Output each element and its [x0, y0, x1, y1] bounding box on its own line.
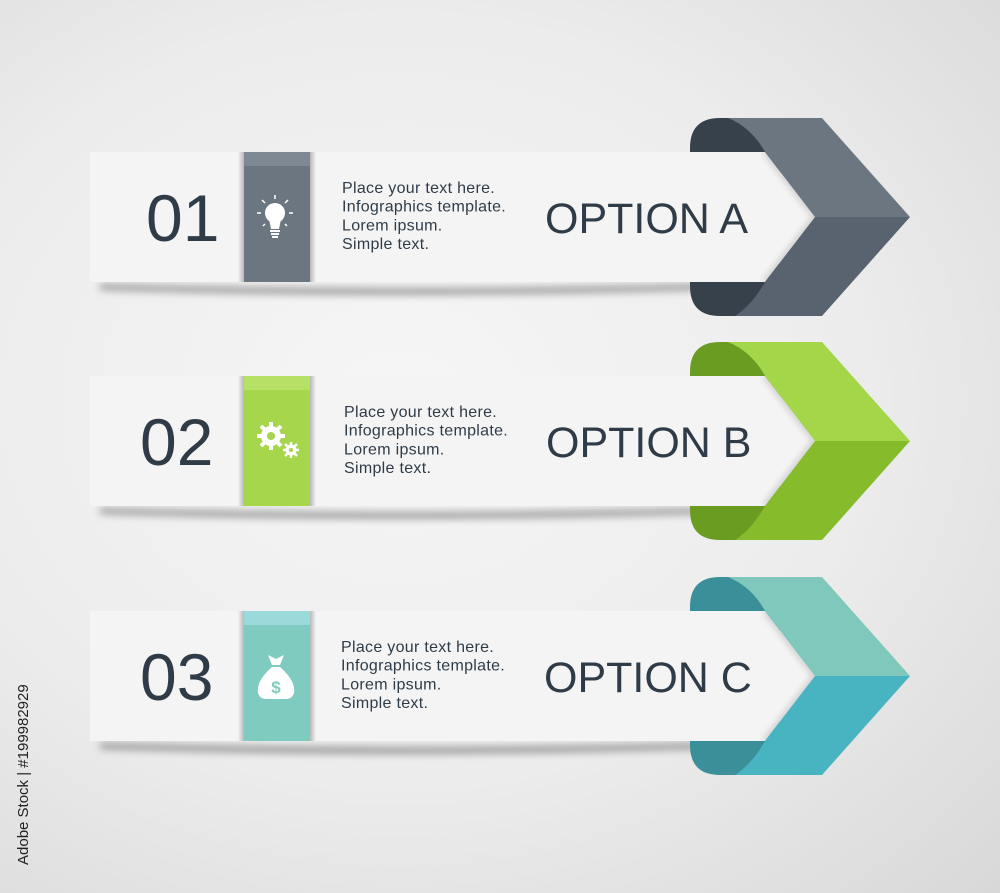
description text C: Simple text. — [341, 695, 428, 712]
arrow upper face — [728, 342, 910, 441]
number 03: 03 — [140, 640, 213, 714]
arrow upper face — [728, 118, 910, 217]
shadow — [100, 284, 700, 295]
row A: option A — [90, 118, 910, 316]
description text C: Infographics template. — [341, 658, 505, 675]
description text A: Place your text here. — [342, 180, 495, 197]
icon: money bag: $ — [271, 678, 281, 697]
arrow back fold — [690, 342, 780, 540]
label OPTION B: OPTION B — [546, 419, 751, 467]
description text A: Lorem ipsum. — [342, 217, 443, 234]
tab with icon — [238, 611, 316, 741]
description text B: Place your text here. — [344, 404, 497, 421]
white band — [90, 611, 815, 741]
description text A: Simple text. — [342, 236, 429, 253]
label OPTION C: OPTION C — [544, 654, 752, 702]
arrow back fold — [690, 577, 780, 775]
arrow back fold — [690, 118, 780, 316]
shadow — [100, 743, 700, 754]
icon: light bulb — [257, 195, 293, 238]
number 01: 01 — [146, 181, 219, 255]
arrow lower face — [735, 217, 910, 316]
arrow lower face — [735, 676, 910, 775]
icon: gears — [257, 422, 299, 458]
shadow — [100, 508, 700, 519]
tab with icon — [238, 152, 316, 282]
white band — [90, 152, 815, 282]
description text B: Infographics template. — [344, 423, 508, 440]
white band — [90, 376, 815, 506]
number 02: 02 — [140, 405, 213, 479]
tab with icon — [238, 376, 316, 506]
side credit text: Adobe Stock | #199982929 — [15, 684, 32, 865]
row C: option C — [90, 577, 910, 775]
row B: option B — [90, 342, 910, 540]
description text B: Simple text. — [344, 460, 431, 477]
description text B: Lorem ipsum. — [344, 441, 445, 458]
description text C: Lorem ipsum. — [341, 676, 442, 693]
description text A: Infographics template. — [342, 199, 506, 216]
description text C: Place your text here. — [341, 639, 494, 656]
arrow lower face — [735, 441, 910, 540]
arrow upper face — [728, 577, 910, 676]
label OPTION A: OPTION A — [545, 195, 748, 243]
